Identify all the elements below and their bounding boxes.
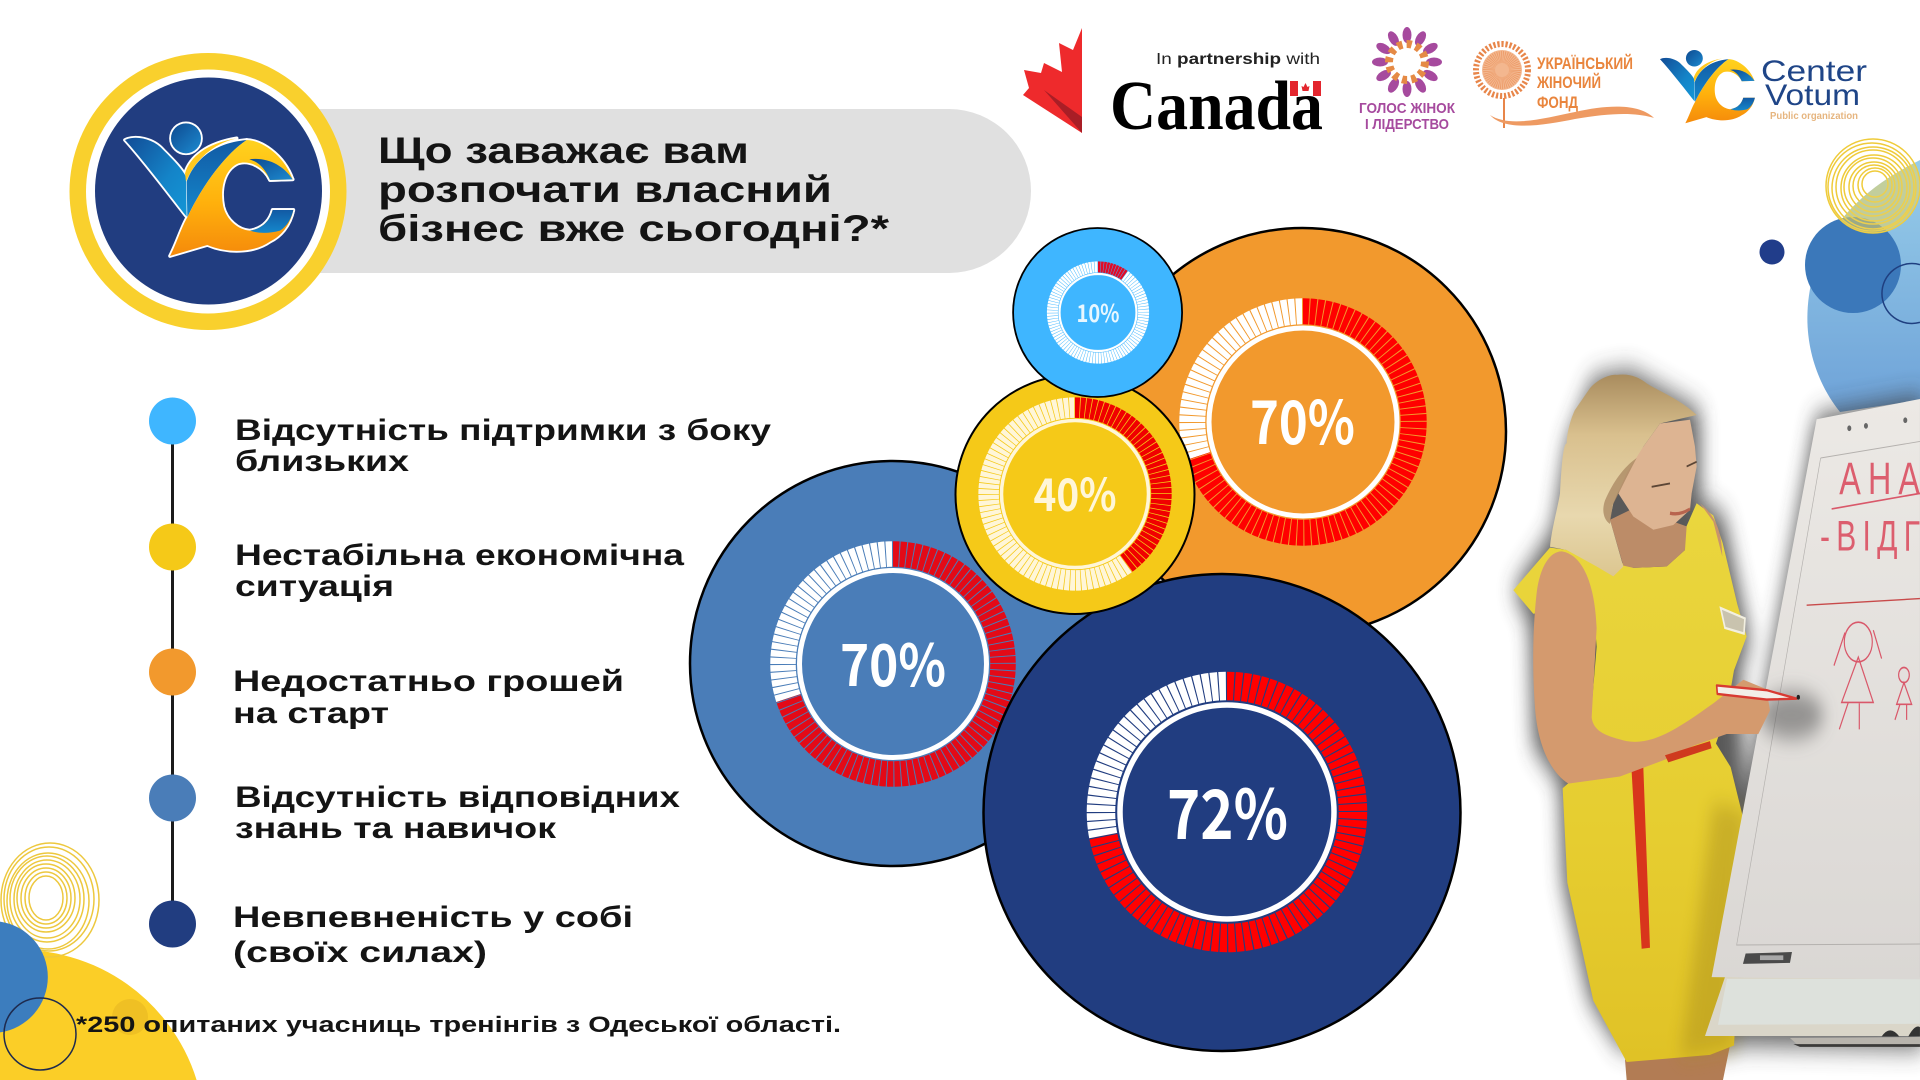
photo: woman at flipchart — [1513, 371, 1920, 1080]
donut: blue 70% — [690, 461, 1095, 866]
decoration: bottom left blobs — [0, 843, 197, 1080]
legend dot: support — [149, 398, 196, 444]
donut: yellow 40%: 40% — [1034, 459, 1116, 524]
logo: Holos Zhinok: І ЛІДЕРСТВО — [1365, 116, 1449, 133]
logo: Ukrainian Women's Fund: УКРАЇНСЬКИЙ — [1537, 54, 1633, 73]
legend labels: знань та навичок — [235, 812, 557, 845]
logo: Ukrainian Women's Fund: ЖІНОЧИЙ — [1536, 73, 1601, 92]
handwriting on flipchart — [1807, 453, 1920, 729]
donut: orange 70%: 70% — [1250, 375, 1355, 462]
donut: light blue 10% — [1013, 228, 1182, 397]
donut: navy 72% — [984, 574, 1460, 1051]
header pill — [200, 109, 1031, 273]
handwriting on flipchart: АНА — [1839, 453, 1920, 504]
soft shadow around figure — [1513, 371, 1920, 1048]
legend labels: ситуація — [235, 570, 394, 603]
legend dot: confidence — [149, 900, 196, 948]
logo badge — [70, 53, 346, 330]
neck and chest — [1610, 505, 1687, 568]
logo: Center Votum: Votum — [1765, 79, 1860, 112]
logo: Ukrainian Women's Fund — [1476, 44, 1654, 128]
legend labels: Нестабільна економічна — [235, 539, 684, 572]
logo: Holos Zhinok — [1359, 27, 1456, 133]
dress — [1513, 503, 1747, 1062]
logo: Ukrainian Women's Fund: ФОНД — [1537, 94, 1578, 112]
donut: navy 72%: 72% — [1167, 760, 1288, 859]
legend dot: money — [149, 648, 196, 696]
legend dot: economy — [149, 524, 196, 570]
title: Що заважає вам — [378, 130, 749, 171]
hair — [1550, 374, 1697, 576]
logo: Canada partnership — [1023, 28, 1323, 145]
logo: Holos Zhinok: ГОЛОС ЖІНОК — [1359, 100, 1456, 117]
face — [1618, 420, 1697, 530]
arm and hand — [1533, 551, 1770, 784]
donut: yellow 40% — [956, 375, 1194, 614]
decoration: top right blobs — [1760, 139, 1920, 412]
legend labels: Відсутність відповідних — [235, 781, 680, 814]
title: розпочати власний — [378, 169, 832, 210]
right shoulder — [1700, 503, 1722, 557]
marker pen — [1717, 685, 1797, 700]
logo: Canada partnership: In partnership with — [1156, 51, 1320, 68]
legs — [1625, 1045, 1730, 1080]
donut: blue 70%: 70% — [840, 619, 946, 703]
legend labels: Відсутність підтримки з боку — [235, 414, 771, 447]
footnote: *250 опитаних учасниць тренінгів з Одеської області. — [76, 1012, 841, 1037]
legend timeline — [149, 398, 196, 948]
flipchart — [1705, 399, 1920, 1047]
legend labels: близьких — [235, 445, 409, 478]
legend labels: (своїх силах) — [233, 936, 487, 969]
title — [378, 130, 890, 249]
donut: light blue 10%: 10% — [1076, 294, 1120, 329]
legend labels: на старт — [233, 697, 389, 730]
logo: Canada partnership: Canada — [1110, 68, 1323, 145]
legend labels: Недостатньо грошей — [233, 665, 624, 698]
legend labels: Невпевненість у собі — [233, 901, 633, 934]
title: бізнес вже сьогодні?* — [378, 208, 890, 249]
legend dot: skills — [149, 774, 196, 822]
logo: Center Votum: Center — [1761, 55, 1867, 88]
donut: orange 70% — [1099, 228, 1506, 635]
handwriting on flipchart: -ВІДГ — [1820, 512, 1920, 560]
red side stripe — [1632, 767, 1650, 949]
hand shadow — [1760, 692, 1823, 739]
legend labels — [233, 414, 771, 969]
logo: Center Votum: Public organization — [1770, 110, 1858, 122]
name badge — [1721, 608, 1745, 634]
logo: Center Votum — [1660, 50, 1867, 123]
